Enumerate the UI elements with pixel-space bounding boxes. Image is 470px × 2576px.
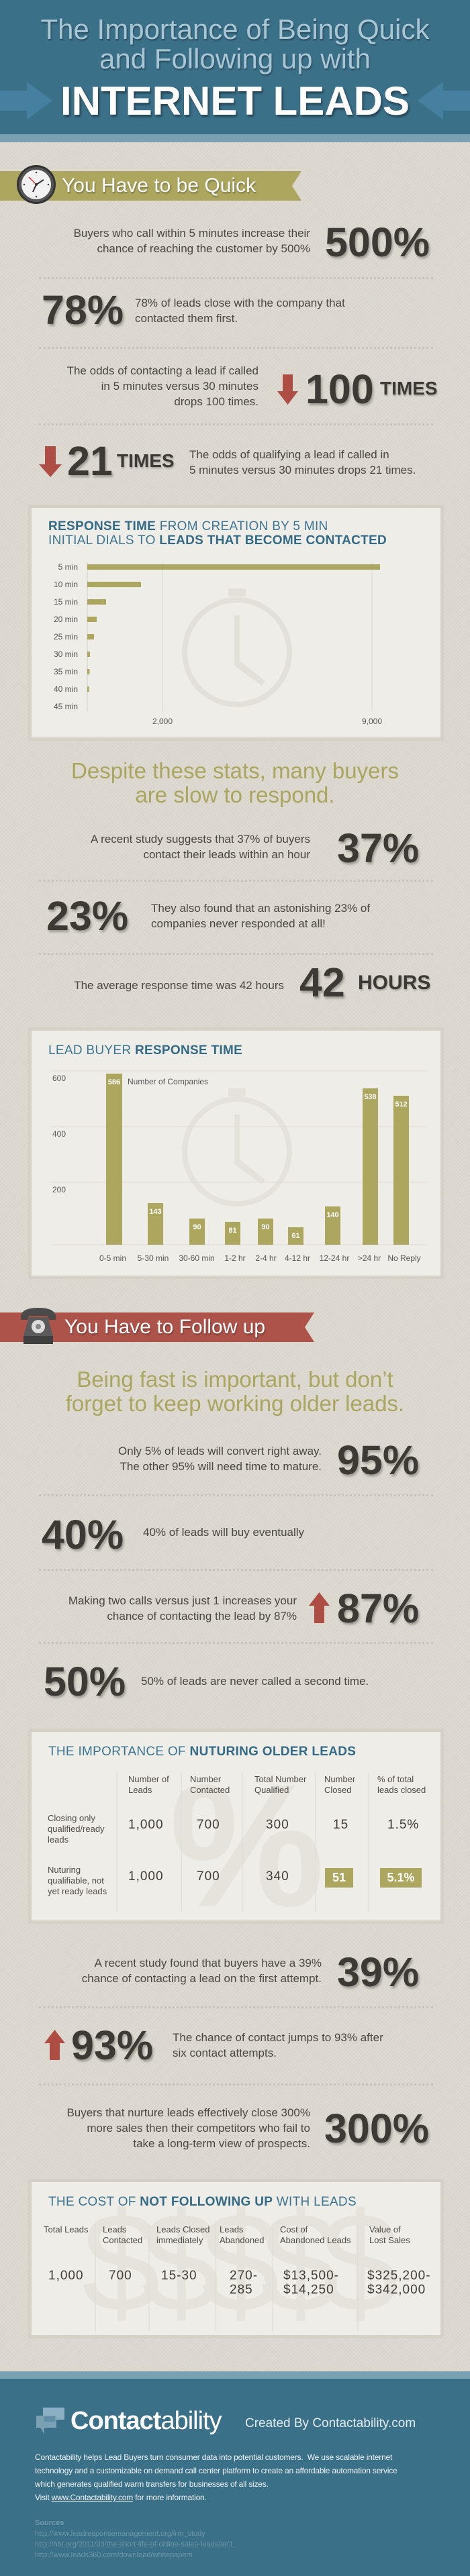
stat: 95% [118,1437,420,1483]
chart title: LEAD BUYER RESPONSE TIME [48,1043,242,1058]
icon: clock [17,165,56,204]
title: internet leads: INTERNET LEADS [60,79,410,123]
stat: 23%: 23% [46,893,128,939]
about paragraph: which generates qualified warm transfers for businesses of all sizes. [35,2479,269,2489]
table grid [95,2225,359,2331]
row: closing only qualified: 1.5% [387,1818,419,1832]
title [41,13,430,76]
icon: contactability logo [36,2405,67,2437]
icon: up arrow [44,2030,65,2060]
stat: 39%: 39% [337,1949,419,1995]
column chart: 400 [52,1129,66,1139]
stat: 78%: 78% of leads close with the company that [135,297,345,309]
stat: 40% [42,1512,304,1557]
panel: lead buyer response time chart [32,1031,440,1276]
column chart: 90 [261,1223,270,1231]
stat: 37%: contact their leads within an hour [143,848,310,861]
icon: down arrow [277,374,298,405]
column chart: No Reply [387,1253,421,1263]
column chart: >24 hr [358,1253,381,1263]
banner heading: You Have to Follow up [64,1316,265,1338]
title: and Following up with [99,43,371,74]
table values: 700 [109,2269,132,2283]
row: closing only qualified [48,1813,419,1845]
stat: 500% [74,219,431,265]
table values: $342,000 [367,2283,426,2297]
table values: $13,500- [283,2269,339,2283]
stat: 23% [46,893,371,939]
stat: 42 hours [74,960,431,1005]
column chart: 140 [326,1211,339,1219]
column chart: 200 [52,1185,66,1194]
table headers: immediately [156,2235,203,2245]
stat: 21 times: TIMES [117,450,175,471]
icon: up arrow [309,1592,330,1623]
table headers: Contacted [103,2235,142,2245]
highlight: 5.1% [380,1868,422,1888]
stat: 42 hours: The average response time was 42 hours [74,979,284,992]
stat: 300%: 300% [324,2106,429,2151]
row: closing only qualified: 300 [266,1818,289,1832]
stat: 87% [68,1586,420,1631]
highlight: 51 [325,1868,353,1888]
table headers: Number [324,1774,355,1784]
sources: Sources [35,2519,64,2527]
table headers: Closed [324,1785,351,1795]
table values: $325,200- [367,2269,431,2283]
stat: 93%: 93% [71,2022,153,2068]
table headers: Qualified [254,1785,289,1795]
stat: 40%: 40% of leads will buy eventually [143,1526,304,1539]
bar chart: 40 min [54,684,78,694]
about paragraph [35,2451,397,2504]
stat: 300%: more sales then their competitors who fail to [87,2122,310,2134]
table headers: Abandoned [220,2235,265,2245]
stat: 39% [82,1949,420,1995]
sources: http://www.leads360.com/download/whitepapers [35,2551,193,2559]
stat: 21 times: 5 minutes versus 30 minutes drops 21 times. [189,464,416,476]
stat: 21 times: The odds of qualifying a lead if called in [189,448,389,461]
column chart: 90 [193,1223,201,1231]
table values [32,2269,440,2298]
column chart: 0-5 min [99,1253,126,1263]
panel: cost of not following up [32,2182,440,2335]
row: nurturing: Nuturing [48,1865,81,1875]
row: closing only qualified: Closing only [48,1813,95,1823]
table headers: Cost of [280,2224,308,2234]
stat: 500%: 500% [325,219,430,265]
stat: 50% [44,1659,369,1704]
row: closing only qualified: 1,000 [128,1818,164,1832]
table headers [128,1774,426,1795]
row: closing only qualified: 700 [197,1818,220,1832]
stat: 500%: Buyers who call within 5 minutes increase their [74,227,310,240]
chart title [48,519,387,548]
column chart: 538 [364,1093,377,1101]
stat: 93% [44,2022,383,2068]
stat: 100 times: drops 100 times. [174,395,258,408]
table headers: Leads [103,2224,126,2234]
table headers [44,2224,410,2245]
heading: despite these stats: Despite these stats, many buyers [71,758,399,783]
banner: you have to follow up [0,1308,314,1344]
stat: 100 times [67,364,438,412]
row: closing only qualified: leads [48,1835,68,1845]
column chart: 12-24 hr [320,1253,349,1263]
bar chart: 10 min [54,580,78,589]
column chart: 512 [395,1100,408,1109]
table headers: Total Leads [44,2224,89,2234]
column chart: 143 [149,1208,162,1216]
stat: 50%: 50% [44,1659,126,1704]
bar chart: 2,000 [152,717,173,726]
stat: 37%: 37% [337,825,419,871]
arrow: left header arrow [0,82,52,119]
title: The Importance of Being Quick [41,13,429,45]
stat: 100 times: in 5 minutes versus 30 minutes [101,380,258,393]
stat: 23%: They also found that an astonishing 23% of [151,902,370,915]
column chart: 2-4 hr [255,1253,277,1263]
stat: 40%: 40% [42,1512,124,1557]
bar chart: 45 min [54,702,78,711]
icon: down arrow [39,446,62,477]
banner heading: You Have to be Quick [62,174,256,197]
about paragraph: Contactability helps Lead Buyers turn consumer data into potential customers. We use scalable internet [35,2453,392,2462]
stat: 78%: contacted them first. [135,312,238,325]
table headers: Leads [220,2224,243,2234]
table headers: Contacted [190,1785,230,1795]
bar chart: 20 min [54,615,78,624]
sources [35,2518,233,2561]
stat: 93%: six contact attempts. [173,2047,277,2059]
table values: $14,250 [283,2283,334,2297]
row: closing only qualified: 15 [333,1818,348,1832]
heading: being fast is important [66,1367,404,1416]
column chart: 586 [108,1078,120,1086]
arrow: right header arrow [418,82,470,119]
row: closing only qualified: qualified/ready [48,1824,105,1834]
row: nurturing: 1,000 [128,1869,164,1884]
column chart [51,1071,427,1263]
stat: 95%: 95% [337,1437,419,1483]
column chart: 600 [52,1074,66,1083]
column chart: 30-60 min [179,1253,215,1263]
column chart: 81 [228,1227,237,1235]
stat: 93%: The chance of contact jumps to 93% after [173,2031,383,2044]
stat: 39%: A recent study found that buyers have a 39% [95,1957,322,1969]
stat: 87%: Making two calls versus just 1 increases your [68,1594,297,1607]
table values: 270- [230,2269,258,2283]
highlight: 51: 51 [332,1871,346,1884]
stat: 87%: chance of contacting the lead by 87% [107,1610,297,1622]
table grid [117,1773,369,1912]
bar chart: 35 min [54,667,78,676]
panel: response time bar chart [32,508,440,737]
panel: nurturing older leads table [32,1732,440,1920]
banner: you have to be quick [0,165,301,204]
column chart: 1-2 hr [224,1253,246,1263]
stat: 37%: A recent study suggests that 37% of buyers [91,833,310,845]
row: nurturing: yet ready leads [48,1886,107,1896]
table values: 15-30 [161,2269,197,2283]
stat: 78%: 78% [42,287,124,333]
table values: 1,000 [48,2269,84,2283]
stat: 100 times: The odds of contacting a lead if called [67,364,258,377]
column chart: 61 [291,1232,300,1240]
stat: 95%: The other 95% will need time to mature. [120,1460,322,1473]
table title: THE COST OF NOT FOLLOWING UP WITH LEADS [48,2195,357,2209]
column chart: 4-12 hr [285,1253,310,1263]
row: nurturing [48,1865,422,1896]
column chart: Number of Companies [128,1077,208,1086]
about paragraph: Visit www.Contactability.com for more information. [35,2493,207,2502]
table headers: Value of [369,2224,401,2234]
created by: Created By Contactability.com [245,2416,416,2430]
stat: 78% [42,287,345,333]
stat: 42 hours: 42 [299,960,345,1005]
about paragraph: technology and a customizable on demand call center platform to create an affordable automation service [35,2466,397,2475]
highlight: 5.1%: 5.1% [387,1871,415,1884]
row: nurturing: 340 [266,1869,289,1884]
table values: 285 [230,2283,253,2297]
bar chart [54,562,382,726]
sources: http://hbr.org/2011/03/the-short-life-of-online-sales-leads/ar/1 [35,2540,233,2548]
stat: 42 hours: HOURS [358,972,430,994]
logo text: Contactability [70,2407,222,2435]
table headers: Number of [128,1774,169,1784]
heading: despite these stats [71,758,399,807]
table headers: leads closed [377,1785,426,1795]
stat: 300%: take a long-term view of prospects. [133,2137,310,2150]
heading: being fast is important: Being fast is important, but don’t [77,1367,393,1392]
table headers: Lost Sales [369,2235,410,2245]
column chart: 5-30 min [138,1253,169,1263]
bar chart: 15 min [54,597,78,607]
table headers: Abandoned Leads [280,2235,351,2245]
table headers: Leads [128,1785,152,1795]
stat: 23%: companies never responded at all! [151,917,326,930]
stat: 100 times: TIMES [380,378,438,399]
stat: 500%: chance of reaching the customer by 500% [97,242,310,255]
chart title: RESPONSE TIME FROM CREATION BY 5 MIN [48,519,328,533]
stat: 300% [66,2106,430,2151]
stat: 87%: 87% [337,1586,419,1631]
heading: despite these stats: are slow to respond. [135,782,335,807]
table headers: Number [190,1774,221,1784]
stat: 37% [91,825,420,871]
stat: 300%: Buyers that nurture leads effectively close 300% [66,2106,310,2119]
icon: telephone [21,1308,56,1344]
heading: being fast is important: forget to keep working older leads. [66,1391,404,1416]
table headers: Leads Closed [156,2224,209,2234]
bar chart: 30 min [54,650,78,659]
stat: 95%: Only 5% of leads will convert right away. [118,1445,322,1457]
chart title: INITIAL DIALS TO LEADS THAT BECOME CONTACTED [48,533,387,548]
table headers: Total Number [254,1774,306,1784]
table headers: % of total [377,1774,414,1784]
stat: 39%: chance of contacting a lead on the first attempt. [82,1972,322,1985]
table title: THE IMPORTANCE OF NUTURING OLDER LEADS [48,1745,356,1759]
bar chart: 9,000 [362,717,382,726]
stat: 50%: 50% of leads are never called a second time. [141,1675,369,1688]
stat: 21 times [39,438,416,484]
bar chart: 25 min [54,632,78,641]
row: nurturing: 700 [197,1869,220,1884]
header [0,0,470,142]
bar chart: 5 min [58,562,78,572]
sources: http://www.leadresponsemanagement.org/lrm_study [35,2530,205,2538]
stat: 100 times: 100 [306,366,374,412]
footer [0,2371,470,2576]
stat: 21 times: 21 [67,438,113,484]
row: nurturing: qualifiable, not [48,1875,104,1886]
